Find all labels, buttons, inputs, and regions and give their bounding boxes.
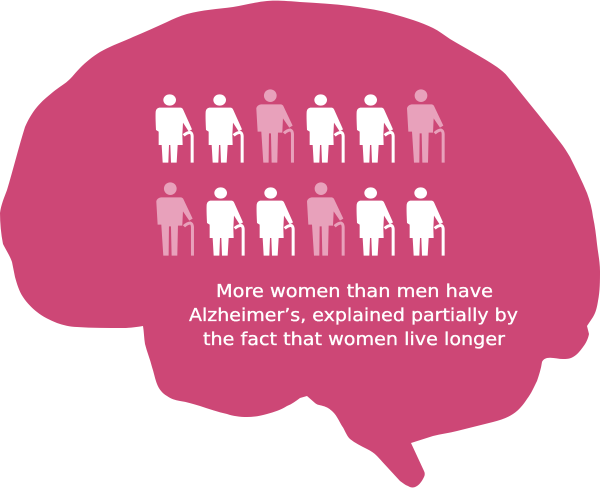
caption text xyxy=(189,282,518,350)
caption text: Alzheimer’s, explained partially by xyxy=(189,306,518,326)
pictogram row 2 xyxy=(156,182,443,256)
icon: woman with cane xyxy=(407,187,443,256)
icon: woman with cane xyxy=(207,187,243,256)
icon: man with cane xyxy=(256,89,293,163)
icon: woman with cane xyxy=(307,94,343,163)
icon: man with cane xyxy=(307,182,343,256)
icon: woman with cane xyxy=(156,94,192,163)
caption text: More women than men have xyxy=(216,282,493,302)
icon: man with cane xyxy=(407,89,443,163)
icon: woman with cane xyxy=(357,187,393,256)
icon: woman with cane xyxy=(357,94,393,163)
icon: woman with cane xyxy=(257,187,293,256)
icon: woman with cane xyxy=(206,94,242,163)
pictogram row 1 xyxy=(156,89,443,163)
icon: man with cane xyxy=(156,182,193,256)
caption text: the fact that women live longer xyxy=(203,330,506,350)
